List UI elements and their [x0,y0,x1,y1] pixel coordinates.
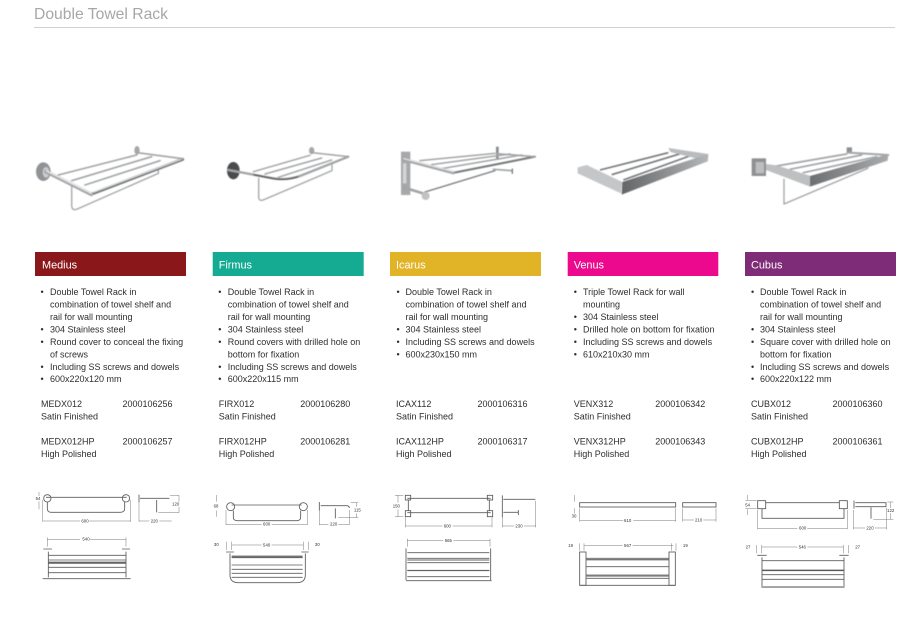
features: Firmus: rail for wall mounting [228,312,310,322]
features: Icarus: combination of towel shelf and [406,300,527,310]
drawing: Venus dimensions: 19 [568,543,574,548]
drawing: Venus dimensions: 210 [695,517,703,522]
features: Venus: • [574,337,577,347]
features: Venus: mounting [583,300,620,310]
features: Firmus: combination of towel shelf and [228,300,349,310]
header: Firmus [213,252,364,276]
header: Medius [35,252,186,276]
features: Medius: • [40,324,44,334]
codes: Firmus: High Polished [219,449,274,459]
drawing: Venus dimensions [568,495,716,585]
codes: Venus: VENX312HP [574,436,626,446]
features: Venus: • [574,324,577,334]
codes: Venus [574,399,705,459]
codes: Firmus [219,399,350,459]
drawing: Cubus dimensions: 122 [887,508,895,513]
codes: Icarus: ICAX112 [396,399,431,409]
header: Cubus [745,252,896,276]
codes: Icarus: ICAX112HP [396,436,444,446]
drawing: Firmus dimensions: 540 [263,542,271,547]
codes: Firmus: FIRX012 [219,399,254,409]
features: Icarus [396,287,535,359]
codes: Firmus: FIRX012HP [219,436,267,446]
drawing: Medius dimensions: 120 [172,501,180,506]
drawing: Icarus dimensions [393,495,536,581]
panel: Icarus [390,252,541,459]
drawing: Venus dimensions: 19 [683,543,688,548]
drawing: Cubus dimensions: 27 [855,544,861,549]
features: Cubus: 600x220x122 mm [760,374,832,384]
drawing: Firmus dimensions: 115 [354,507,361,512]
drawing: Firmus dimensions: 30 [214,542,219,547]
codes: Venus: VENX312 [574,399,613,409]
header: Cubus: Cubus [751,260,783,272]
features: Medius: • [40,287,44,297]
codes: Firmus: Satin Finished [219,411,276,421]
header: Medius: Medius [42,260,78,272]
drawing: Firmus dimensions: 220 [330,522,338,527]
drawing: Medius dimensions: 220 [151,518,159,523]
features: Medius: • [40,362,44,372]
drawing: Cubus dimensions [745,495,895,587]
features: Icarus: • [396,349,400,359]
features: Medius [40,287,183,384]
drawing: Firmus dimensions: 68 [214,504,219,509]
drawing: Cubus dimensions: 54 [745,502,751,507]
drawing: Venus dimensions: 30 [572,513,577,518]
features: Venus: Drilled hole on bottom for fixation [583,324,715,334]
features: Medius: Double Towel Rack in [50,287,136,297]
features: Firmus: • [218,374,221,384]
drawing: Firmus dimensions [214,495,361,583]
features: Firmus: • [218,337,221,347]
features: Medius: combination of towel shelf and [50,300,171,310]
title: Double Towel Rack [34,6,168,23]
header: Venus: Venus [574,260,605,272]
codes: Icarus: High Polished [396,449,452,459]
drawing: Icarus dimensions: 230 [515,523,523,528]
drawing: Cubus dimensions: 546 [799,544,807,549]
drawing: Icarus dimensions: 600 [444,523,452,528]
features: Venus: • [574,312,577,322]
features: Cubus: Including SS screws and dowels [760,362,890,372]
photo: Venus rack [578,148,708,195]
codes: Cubus: 2000106361 [832,436,883,446]
drawing: Icarus dimensions: 150 [393,503,401,508]
features: Cubus: Double Towel Rack in [760,287,846,297]
codes: Medius: Satin Finished [41,411,98,421]
codes: Firmus: 2000106280 [300,399,350,409]
header: Icarus [390,252,541,276]
header: Venus [568,252,718,276]
features: Cubus: • [751,337,754,347]
codes: Icarus [396,399,528,459]
features: Cubus: • [751,287,754,297]
codes: Medius: 2000106256 [122,399,173,409]
drawing: Cubus dimensions: 600 [799,526,807,531]
codes: Icarus: 2000106317 [478,436,528,446]
features: Cubus: Square cover with drilled hole on [760,337,891,347]
features: Icarus: 304 Stainless steel [406,324,481,334]
codes: Firmus: 2000106281 [300,436,350,446]
features: Venus: Including SS screws and dowels [583,337,713,347]
drawing: Medius dimensions: 600 [81,518,89,523]
features: Medius: 304 Stainless steel [50,324,126,334]
features: Venus [574,287,715,359]
features: Firmus: 304 Stainless steel [228,324,303,334]
codes: Venus: 2000106343 [655,436,705,446]
features: Firmus [218,287,360,384]
features: Cubus: bottom for fixation [760,349,832,359]
drawing: Medius dimensions: 54 [36,496,41,501]
features: Icarus: rail for wall mounting [406,312,488,322]
features: Medius: Round cover to conceal the fixing [50,337,183,347]
features: Firmus: Round covers with drilled hole on [228,337,360,347]
codes: Venus: Satin Finished [574,411,631,421]
codes: Venus: High Polished [574,449,629,459]
features: Venus: • [574,349,577,359]
features: Firmus: bottom for fixation [228,349,299,359]
drawing: Icarus dimensions: 565 [445,538,453,543]
drawing: Firmus dimensions: 30 [315,542,320,547]
drawing: Cubus dimensions: 27 [746,544,751,549]
features: Medius: • [40,337,44,347]
features: Venus: Triple Towel Rack for wall [583,287,685,297]
features: Medius: 600x220x120 mm [50,374,122,384]
features: Icarus: • [396,337,400,347]
features: Icarus: • [396,324,400,334]
features: Cubus: • [751,362,754,372]
features: Firmus: 600x220x115 mm [228,374,299,384]
features: Icarus: 600x230x150 mm [406,349,477,359]
codes: Cubus: High Polished [751,449,807,459]
features: Firmus: Including SS screws and dowels [228,362,357,372]
codes: Cubus [751,399,883,459]
features: Medius: • [40,374,44,384]
codes: Cubus: 2000106360 [832,399,883,409]
features: Cubus: combination of towel shelf and [760,300,881,310]
panel: Medius [35,252,186,459]
features: Medius: rail for wall mounting [50,312,133,322]
panel: Firmus [213,252,364,459]
features: Icarus: Including SS screws and dowels [406,337,535,347]
codes: Icarus: 2000106316 [478,399,528,409]
codes: Cubus: CUBX012 [751,399,791,409]
features: Icarus: Double Towel Rack in [406,287,492,297]
features: Venus: 304 Stainless steel [583,312,659,322]
drawing: Medius dimensions [36,492,180,579]
features: Venus: 610x210x30 mm [583,349,650,359]
drawing: Venus dimensions: 567 [624,543,632,548]
codes: Cubus: CUBX012HP [751,436,804,446]
panel: Cubus [745,252,896,459]
codes: Medius: 2000106257 [122,436,173,446]
features: Medius: of screws [50,349,89,359]
photo: Firmus rack [227,147,348,200]
codes: Medius: MEDX012 [41,399,82,409]
codes: Icarus: Satin Finished [396,411,453,421]
drawing: Venus dimensions: 610 [624,518,632,523]
photo: Icarus rack [401,147,535,200]
features: Venus: • [574,287,577,297]
codes: Medius: MEDX012HP [41,436,95,446]
codes: Cubus: Satin Finished [751,411,808,421]
photo: Medius rack [36,146,183,210]
photo: Cubus rack [752,147,888,204]
header: Icarus: Icarus [396,260,426,272]
features: Firmus: • [218,324,221,334]
drawing: Firmus dimensions: 600 [263,521,271,526]
drawing: Cubus dimensions: 220 [866,525,874,530]
codes: Venus: 2000106342 [655,399,705,409]
features: Cubus: 304 Stainless steel [760,324,836,334]
features: Firmus: • [218,287,221,297]
features: Cubus: • [751,374,754,384]
codes: Medius [41,399,173,459]
panel: Venus [568,252,718,459]
header: Firmus: Firmus [219,260,253,272]
features: Cubus [751,287,891,384]
features: Medius: Including SS screws and dowels [50,362,180,372]
codes: Medius: High Polished [41,449,97,459]
drawing: Medius dimensions: 540 [82,537,90,542]
features: Cubus: rail for wall mounting [760,312,843,322]
features: Icarus: • [396,287,400,297]
features: Cubus: • [751,324,754,334]
features: Firmus: • [218,362,221,372]
features: Firmus: Double Towel Rack in [228,287,314,297]
